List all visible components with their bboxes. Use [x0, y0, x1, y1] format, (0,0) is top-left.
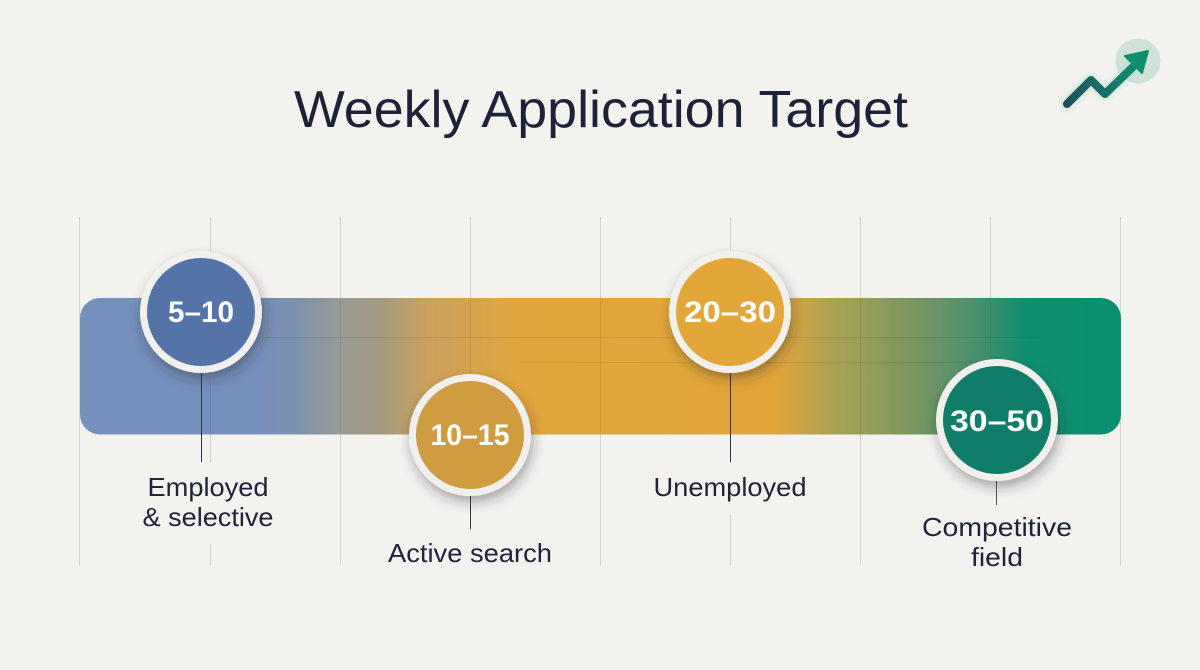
marker: 30–50 competitive field: 30–50 — [950, 405, 1044, 438]
marker: 5–10 employed and selective — [140, 251, 274, 532]
grid lines — [80, 217, 1120, 565]
marker: 5–10 employed and selective: & selective — [142, 502, 274, 532]
icon: upward trend arrow — [1067, 38, 1160, 104]
marker: 10–15 active search: 10–15 — [430, 419, 510, 452]
marker: 30–50 competitive field: Competitive — [922, 512, 1072, 542]
title: Weekly Application Target — [294, 81, 909, 139]
marker: 20–30 unemployed — [654, 251, 806, 502]
marker: 10–15 active search: Active search — [388, 538, 552, 568]
marker: 10–15 active search — [388, 374, 552, 568]
marker: 30–50 competitive field — [922, 359, 1072, 572]
gradient range bar — [80, 298, 1121, 434]
marker: 20–30 unemployed: 20–30 — [684, 296, 776, 329]
marker: 5–10 employed and selective: Employed — [148, 472, 268, 502]
marker: 30–50 competitive field: field — [971, 542, 1023, 572]
marker: 20–30 unemployed: Unemployed — [654, 472, 806, 502]
marker: 5–10 employed and selective: 5–10 — [168, 296, 234, 329]
